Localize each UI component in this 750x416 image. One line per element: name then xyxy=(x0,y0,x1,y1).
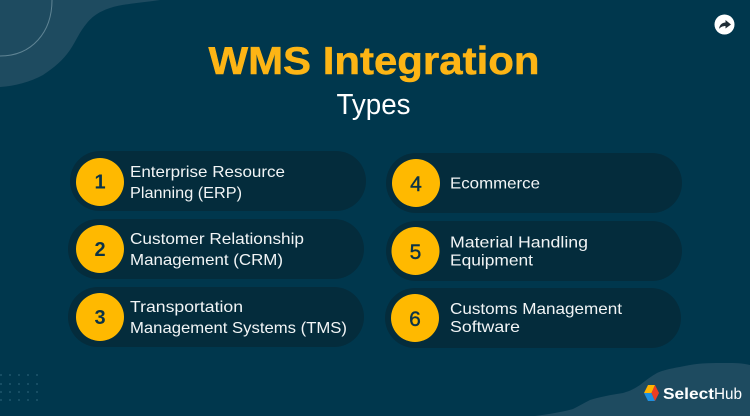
subtitle: Types xyxy=(336,89,410,121)
logo: SelectHub xyxy=(644,385,742,403)
item 3: Transportation Management Systems xyxy=(68,287,364,347)
logo: SelectHub: Hub xyxy=(714,386,742,403)
item 3: Transportation Management Systems: 3 xyxy=(94,307,106,329)
item 2: Customer Relationship Management: 2 xyxy=(94,239,106,261)
item 6: Customs Management Software: 6 xyxy=(409,308,421,331)
item 2: Customer Relationship Management: Customer Relationship xyxy=(130,231,304,248)
item 6: Customs Management Software xyxy=(385,288,681,348)
icon: share arrow xyxy=(714,14,734,34)
item 4: Ecommerce xyxy=(386,153,682,213)
title: WMS Integration xyxy=(208,40,540,83)
item 1: Enterprise Resource Planning: Enterprise Resource xyxy=(130,164,285,181)
item 1: Enterprise Resource Planning xyxy=(70,151,366,211)
item 5: Material Handling Equipment: Material Handling xyxy=(450,234,588,252)
item 4: Ecommerce: Ecommerce xyxy=(450,176,540,192)
item 3: Transportation Management Systems: Management Systems (TMS) xyxy=(130,320,347,337)
item 6: Customs Management Software: Customs Management xyxy=(450,301,623,318)
item 3: Transportation Management Systems: Transportation xyxy=(130,299,243,316)
item 2: Customer Relationship Management: Management (CRM) xyxy=(130,252,283,269)
item 5: Material Handling Equipment: 5 xyxy=(410,241,421,264)
item 2: Customer Relationship Management xyxy=(68,219,364,279)
item 1: Enterprise Resource Planning: Planning (ERP) xyxy=(130,185,242,202)
item 5: Material Handling Equipment: Equipment xyxy=(450,252,534,270)
item 4: Ecommerce: 4 xyxy=(410,173,422,196)
item 6: Customs Management Software: Software xyxy=(450,319,520,336)
logo: SelectHub: Select xyxy=(663,386,715,403)
bottom-right background blob xyxy=(535,363,750,416)
dot grid decoration xyxy=(0,374,38,401)
top-left background blob xyxy=(0,0,160,87)
item 5: Material Handling Equipment xyxy=(386,221,682,281)
item 1: Enterprise Resource Planning: 1 xyxy=(94,172,106,194)
